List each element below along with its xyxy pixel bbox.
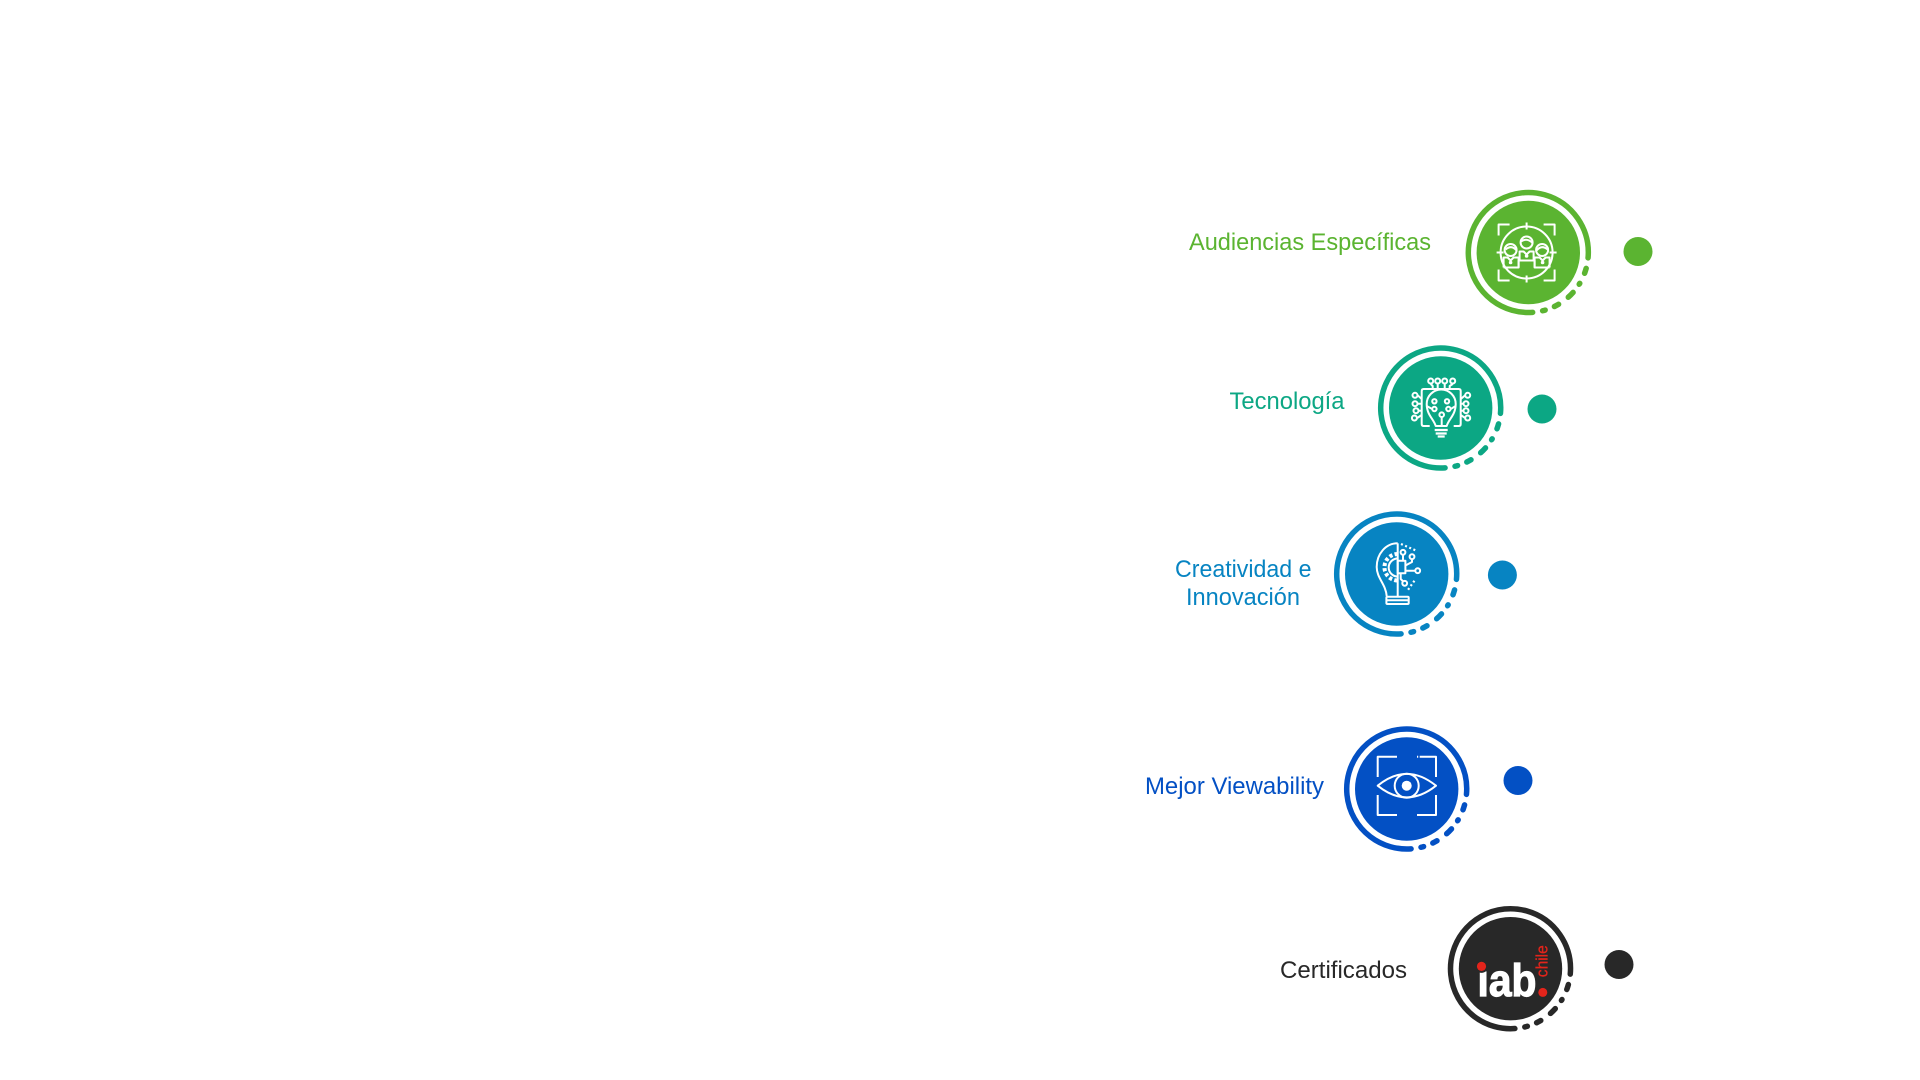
- label: Tecnología: Tecnología: [1230, 388, 1345, 415]
- item: Audiencias Específicas: [1189, 178, 1652, 327]
- icon: circuit bulb: [1412, 378, 1470, 436]
- badge: tecnología: [1367, 334, 1515, 482]
- label: Creatividad e Innovación: Innovación: [1186, 584, 1300, 611]
- dot: [1528, 394, 1556, 424]
- item: Tecnología: [1230, 334, 1556, 482]
- item: Certificados: [1280, 895, 1634, 1043]
- label: Certificados: Certificados: [1280, 957, 1407, 984]
- badge: iab chile: [1436, 895, 1585, 1043]
- icon: audience target: [1497, 222, 1557, 282]
- item: Creatividad e Innovación: [1175, 500, 1517, 648]
- dot: [1504, 766, 1532, 795]
- icon: eye in frame: [1378, 757, 1436, 815]
- label: Audiencias Específicas: Audiencias Específicas: [1189, 229, 1431, 256]
- logo: iab chile: iab: [1478, 955, 1536, 1006]
- badge: audiencias: [1454, 178, 1602, 327]
- logo: iab chile: chile: [1532, 945, 1552, 977]
- dot: [1624, 237, 1652, 266]
- label: Creatividad e Innovación: [1175, 556, 1312, 611]
- item: Mejor Viewability: [1145, 715, 1532, 863]
- icon: half gear half circuit bulb: [1377, 543, 1420, 604]
- dot: [1604, 950, 1634, 979]
- label: Mejor Viewability: Mejor Viewability: [1145, 773, 1324, 800]
- badge: viewability: [1333, 715, 1481, 863]
- badge: creatividad: [1323, 500, 1471, 648]
- dot: [1488, 560, 1517, 590]
- label: Creatividad e Innovación: Creatividad e: [1175, 556, 1312, 583]
